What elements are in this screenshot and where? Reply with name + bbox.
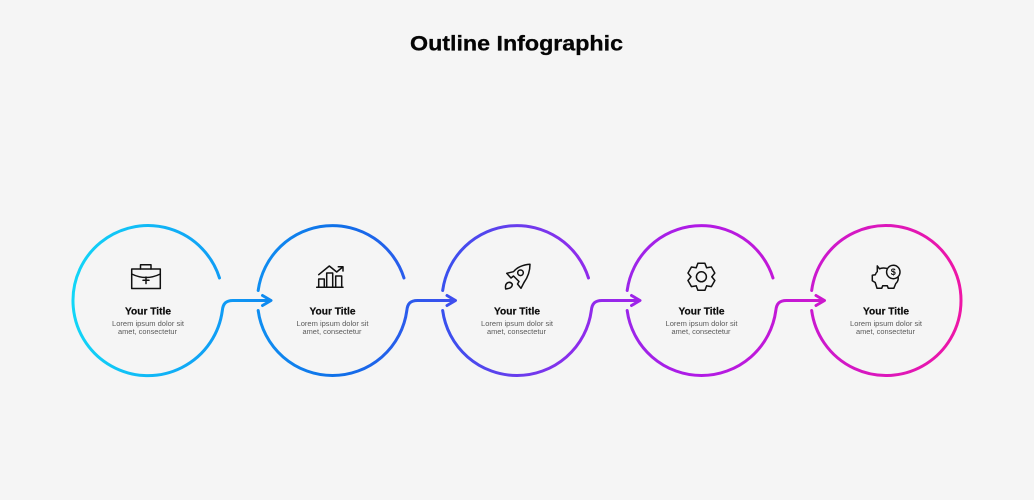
panel: step 5: [812, 226, 961, 376]
ring and arrow 2: [258, 226, 456, 375]
ring and arrow 3: [443, 226, 640, 375]
ring and arrow 4: [627, 226, 824, 375]
heading 2: Your Title: [310, 306, 356, 318]
title: Outline Infographic: [410, 32, 623, 56]
panel: step 3: [443, 226, 640, 375]
icon: gear: [687, 263, 716, 290]
text block 1: amet, consectetur: [118, 329, 178, 336]
text block 5: Lorem ipsum dolor sit: [850, 321, 922, 328]
text block 1: Lorem ipsum dolor sit: [112, 321, 184, 328]
icon: rocket: [505, 264, 530, 289]
heading 4: Your Title: [678, 306, 725, 318]
heading 5: Your Title: [863, 306, 910, 318]
icon: piggy bank with coin: $: [891, 267, 896, 277]
text block 2: [296, 321, 369, 336]
text block 4: [666, 321, 738, 336]
icon: bar chart growth: [317, 266, 343, 287]
panel: step 2: [258, 226, 456, 375]
panel: step 1: [73, 226, 271, 376]
text block 4: Lorem ipsum dolor sit: [666, 321, 738, 328]
ring 5: [812, 226, 961, 376]
icon: briefcase: [132, 265, 160, 288]
heading 1: Your Title: [125, 306, 172, 318]
text block 3: amet, consectetur: [487, 329, 547, 336]
text block 1: [112, 321, 184, 336]
icon: piggy bank with coin: [872, 265, 900, 288]
ring and arrow 1: [73, 226, 271, 376]
text block 3: [481, 321, 553, 336]
text block 3: Lorem ipsum dolor sit: [481, 321, 553, 328]
text block 4: amet, consectetur: [672, 329, 731, 336]
panel: step 4: [627, 226, 824, 375]
text block 2: amet, consectetur: [302, 329, 362, 336]
text block 2: Lorem ipsum dolor sit: [296, 321, 369, 328]
text block 5: [850, 321, 922, 336]
text block 5: amet, consectetur: [856, 329, 916, 336]
heading 3: Your Title: [494, 306, 541, 318]
